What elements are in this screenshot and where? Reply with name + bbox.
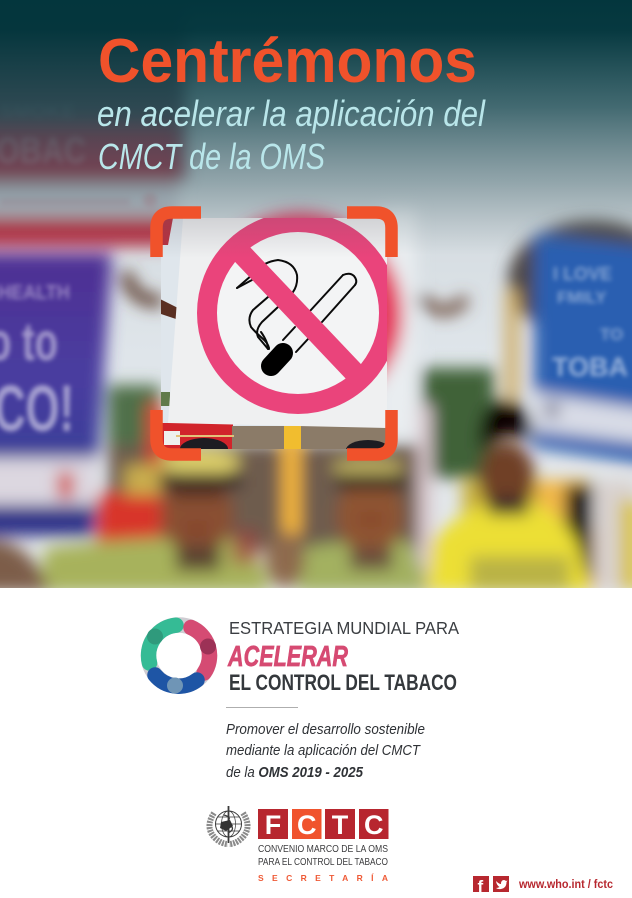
- logo: FCTC: T: [332, 810, 349, 840]
- crop background: [161, 218, 296, 426]
- bottom-right bracket: [347, 410, 392, 454]
- logo: FCTC: C: [297, 810, 316, 840]
- person right: [426, 400, 592, 592]
- icon: facebook: [473, 876, 489, 896]
- red banner top left: [0, 0, 185, 246]
- stick and hand: [282, 430, 301, 535]
- white extension of sign: [380, 208, 416, 436]
- cigarette filter: [271, 353, 283, 366]
- strategy heading: ACELERAR: ACELERAR: [227, 641, 348, 673]
- sign board: [168, 218, 387, 428]
- blurred sign lettering: HEALTH: [0, 282, 70, 304]
- logo: strategy ring: [147, 625, 216, 694]
- ring dot dark green: [147, 628, 163, 644]
- icon: cigarette and smoke: [237, 260, 356, 352]
- strategy heading: el control del tabaco: EL CONTROL DEL TABACO: [229, 670, 457, 695]
- ring segment pink: [191, 628, 209, 673]
- top-right bracket: [347, 212, 392, 257]
- description text: Promover el desarrollo sostenible: [226, 721, 425, 738]
- photo: sharp no-smoking sign in focus: [158, 218, 390, 460]
- ring segment blue: [155, 675, 197, 686]
- description text: mediante la aplicación del CMCT: [226, 742, 422, 759]
- logo: FCTC: C: [364, 810, 383, 840]
- top dark teal gradient: [0, 0, 632, 255]
- subtitle line 2: CMCT de la OMS: [98, 136, 325, 177]
- logo: FCTC: F: [265, 810, 281, 840]
- logo: FCTC: [258, 809, 388, 840]
- panel: blurred photo of protesters: [0, 0, 632, 595]
- description text: de la OMS 2019 - 2025: [226, 764, 364, 781]
- focus brackets: [156, 212, 392, 454]
- person middle: [297, 459, 428, 592]
- prohibition circle: [207, 222, 389, 404]
- ring dot grey blue: [167, 678, 183, 694]
- blurred sign lettering: I LOVE: [553, 264, 612, 284]
- icon: twitter: [493, 876, 509, 892]
- description text: [226, 721, 425, 781]
- blurred sign lettering: FMILY: [557, 288, 607, 307]
- title: Centrémonos: Centrémonos: [98, 27, 477, 96]
- blurred sign lettering: TOBA: [552, 352, 628, 382]
- trees: [108, 368, 494, 478]
- blurred sign lettering: [0, 264, 628, 445]
- strategy heading: ESTRATEGIA MUNDIAL PARA: [229, 618, 459, 638]
- arms: [126, 272, 162, 302]
- right dark hair behind blue sign: [508, 220, 632, 340]
- panel: blurred photo of protesters: SMOKE: [0, 101, 75, 123]
- ring dot dark red: [200, 638, 216, 654]
- FCTC caption: PARA EL CONTROL DEL TABACO: [258, 856, 388, 868]
- prohibition bar: [235, 247, 361, 379]
- purple sign: [0, 253, 112, 460]
- icon: facebook: f: [478, 877, 484, 896]
- ring segment green: [149, 625, 176, 663]
- secretaria label: SECRETARÍA: [258, 873, 388, 883]
- FCTC caption: CONVENIO MARCO DE LA OMS: [258, 843, 388, 855]
- white lower panel: [0, 588, 632, 898]
- top-left bracket: [156, 212, 201, 257]
- blue sign right: [533, 233, 632, 465]
- FCTC caption: [258, 843, 388, 868]
- person bottom left: [0, 540, 50, 592]
- blurred sign lettering: TO: [600, 325, 623, 344]
- subtitle line 1: en acelerar la aplicación del: [97, 93, 486, 134]
- bottom-left bracket: [156, 410, 201, 454]
- website link: www.who.int / fctc: [518, 877, 613, 891]
- person left: [40, 450, 270, 592]
- mid background: [108, 445, 428, 550]
- icon: WHO emblem: [209, 806, 248, 844]
